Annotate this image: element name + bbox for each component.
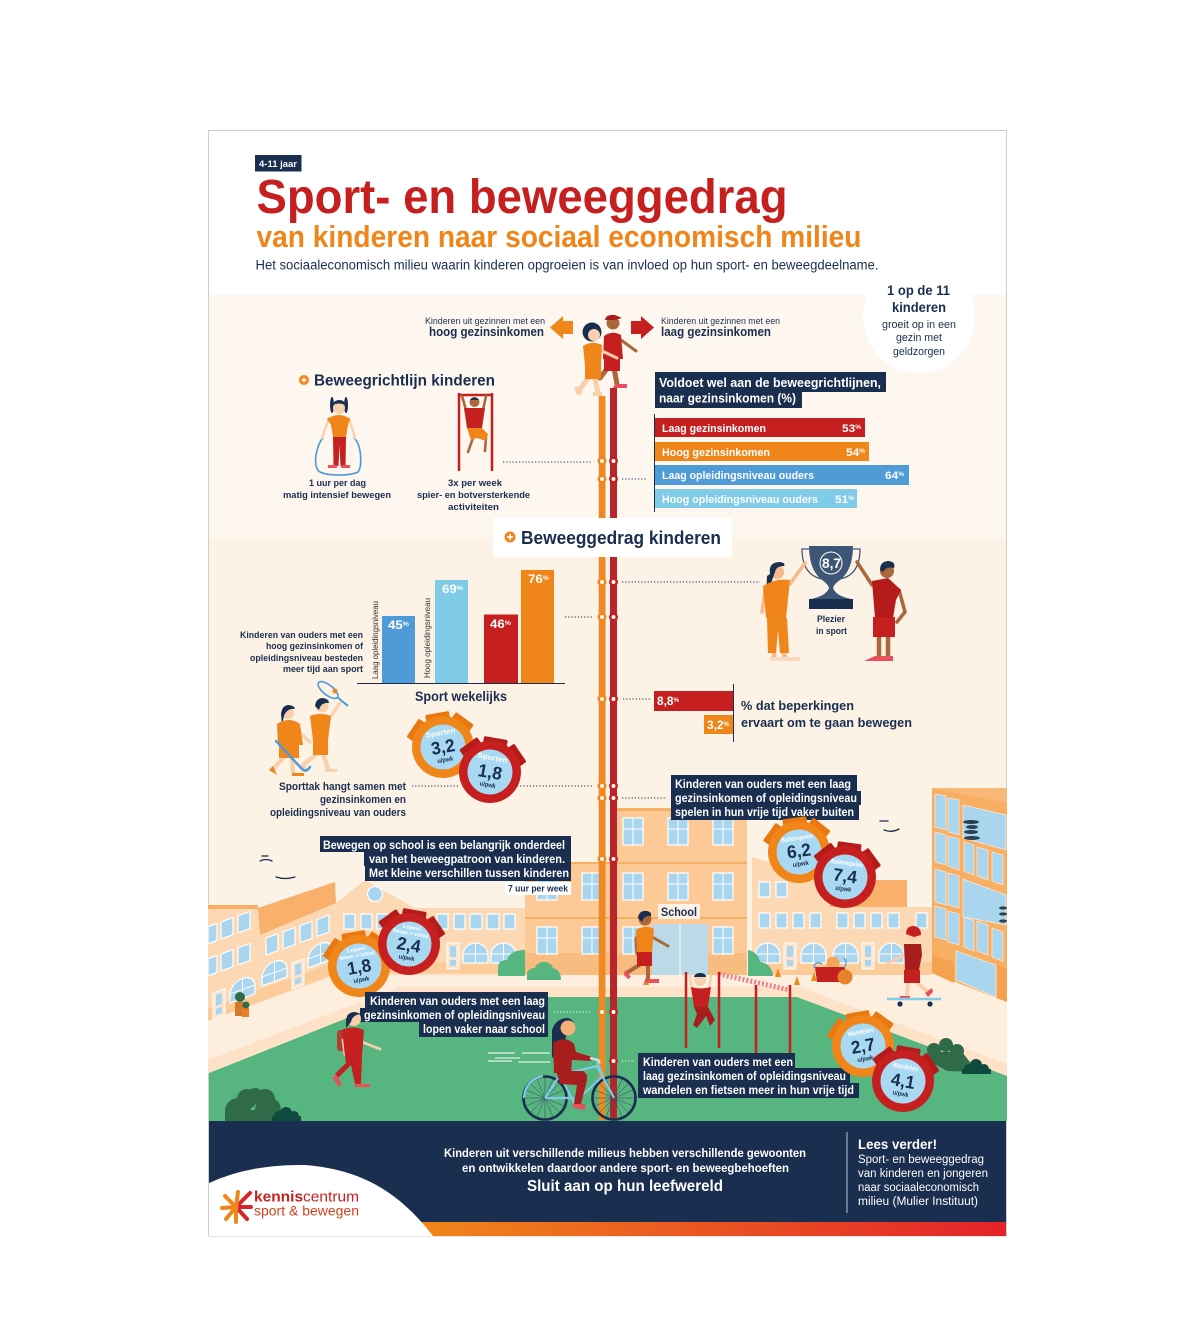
stopwatch: lopen/fietsen 1,8: 1,8 (346, 955, 373, 979)
bar 76%: 76 (528, 574, 541, 586)
stopwatch: buitenspelen 6,2 (760, 813, 837, 887)
footer message: Kinderen uit verschillende milieus hebben verschillende gewoonten (444, 1146, 806, 1160)
arrow right red (631, 316, 654, 339)
text: 3x per week (417, 478, 530, 513)
text: sporttak: opleidingsniveau van ouders (270, 807, 406, 819)
figure: girl on bicycle (524, 1018, 636, 1120)
text: 3x per week: activiteiten (448, 502, 499, 513)
central orange line (599, 396, 606, 1120)
chart: beperkingen: % dat beperkingen (741, 698, 854, 713)
text: sporttak: Sporttak hangt samen met (279, 781, 406, 793)
bar: laag opleidingsniveau 64%: % (898, 472, 905, 478)
bar chart: sport wekelijks: Hoog opleidingsniveau (423, 598, 432, 678)
stopwatch: sporten 1,8: u/pwk (479, 780, 496, 790)
illustration: children with hockey stick and racket (269, 679, 348, 776)
right lower building (752, 857, 932, 976)
callout: wandelen en fietsen: Kinderen van ouders met een (643, 1055, 793, 1069)
footer gradient stripe (420, 1222, 1006, 1236)
bar 45%: 45 (388, 620, 401, 632)
bar 46%: 46 (490, 619, 503, 631)
icon: girl with skipping rope (316, 397, 361, 475)
stopwatch: buitenspelen 7,4 (807, 838, 884, 912)
bar: hoog opleidingsniveau 51%: 51 (835, 494, 847, 506)
text: 3x per week: spier- en botversterkende (417, 490, 530, 501)
stopwatch: sporten 3,2: 3,2 (429, 735, 457, 759)
section heading: Beweeggedrag kinderen (493, 518, 732, 557)
chart: beperkingen: 3,2 (707, 720, 723, 732)
callout: wandelen en fietsen: laag gezinsinkomen of opleidingsniveau (643, 1069, 846, 1083)
callout: lopen naar school: Kinderen van ouders met een laag (370, 994, 545, 1008)
footer message: en ontwikkelen daardoor andere sport- en beweegbehoeften (462, 1161, 789, 1175)
label: hoog gezinsinkomen (425, 316, 545, 339)
bar 76%: % (543, 576, 550, 582)
stopwatch: wandelen 2,7 (823, 1006, 902, 1082)
bar: laag gezinsinkomen 53%: % (855, 425, 862, 431)
bar 45%: % (403, 622, 410, 628)
stopwatch: lopen/fietsen 2,4: fietsen -> school (392, 928, 429, 940)
left building (208, 880, 525, 1021)
callout: buitenspelen: Kinderen van ouders met een laag (675, 777, 851, 791)
callout: bewegen op school: Met kleine verschillen tussen kinderen (369, 866, 569, 880)
callout: buitenspelen: spelen in hun vrije tijd vaker buiten (675, 805, 854, 819)
callout circle: 1 op de 11 kinderen: geldzorgen (893, 346, 945, 358)
figure: kid on skateboard (887, 926, 941, 1007)
bar 69%: 69 (442, 584, 455, 596)
illustration: children with trophy: Plezier (817, 614, 845, 624)
callout circle: 1 op de 11 kinderen: kinderen (892, 300, 946, 315)
title: Sport- en beweeggedrag (256, 171, 788, 224)
bar: laag opleidingsniveau 64% (655, 465, 909, 485)
age tag (255, 155, 302, 172)
bar 76% (521, 570, 554, 683)
bar: hoog gezinsinkomen 54%: 54 (846, 447, 858, 459)
bar: hoog opleidingsniveau 51%: Hoog opleidingsniveau ouders (662, 494, 818, 506)
stopwatch: lopen/fietsen 2,4: 2,4 (395, 933, 422, 957)
callout: bewegen op school: Bewegen op school is een belangrijk onderdeel (323, 838, 565, 852)
logo panel: kenniscentrum (254, 1188, 359, 1206)
stopwatch: sporten 3,2 (403, 707, 482, 783)
read more panel: van kinderen en jongeren (858, 1168, 988, 1180)
bushes near school (498, 950, 773, 980)
footer band (209, 1121, 1006, 1236)
chart heading: Voldoet wel aan de beweegrichtlijnen: Voldoet wel aan de beweegrichtlijnen, (659, 375, 881, 390)
bar: laag gezinsinkomen 53%: Laag gezinsinkomen (662, 423, 766, 435)
stopwatch: buitenspelen 7,4: u/pwk (835, 885, 852, 894)
stopwatch: wandelen 4,1: 4,1 (889, 1069, 917, 1093)
callout circle: 1 op de 11 kinderen: groeit op in een (882, 319, 956, 331)
stopwatch: lopen/fietsen 1,8: Lopen/ (347, 946, 366, 955)
text: kinderen besteden meer tijd aan sport: meer tijd aan sport (283, 664, 364, 675)
stopwatch: wandelen 4,1: u/pwk (892, 1089, 909, 1099)
logo panel (209, 1165, 433, 1236)
callout: bewegen op school (320, 836, 571, 881)
read more panel: Lees verder! (858, 1136, 937, 1152)
chart: beperkingen (654, 684, 912, 742)
footer message (444, 1146, 806, 1195)
text: kinderen besteden meer tijd aan sport: opleidingsniveau besteden (250, 653, 363, 664)
footer message: Sluit aan op hun leefwereld (527, 1178, 723, 1195)
stopwatch: lopen/fietsen 1,8: fietsen -> school (339, 950, 376, 962)
label: 7 uur per week: 7 uur per week (508, 884, 569, 894)
label: hoog gezinsinkomen: hoog gezinsinkomen (429, 324, 544, 339)
lawn (209, 997, 1007, 1121)
bar 69%: % (457, 586, 464, 592)
illustration: children with trophy (762, 546, 905, 661)
text: 3x per week: 3x per week (448, 478, 503, 489)
bar 69% (435, 580, 468, 683)
bar: laag opleidingsniveau 64%: Laag opleidingsniveau ouders (662, 470, 814, 482)
figure: boy walking at school (624, 911, 668, 983)
chart: beperkingen: ervaart om te gaan bewegen (741, 715, 912, 730)
bush right (927, 1038, 991, 1074)
bar: laag gezinsinkomen 53% (655, 418, 865, 437)
logo panel: sport & bewegen (254, 1202, 359, 1218)
stopwatch: sporten 3,2: u/pwk (437, 755, 454, 765)
stopwatch: lopen/fietsen 2,4: u/pwk (398, 953, 415, 963)
callout: buitenspelen (671, 775, 861, 820)
read more panel: naar sociaaleconomisch (858, 1182, 979, 1194)
callout: wandelen en fietsen: wandelen en fietsen meer in hun vrije tijd (642, 1083, 854, 1097)
text: kinderen besteden meer tijd aan sport: Kinderen van ouders met een (240, 630, 363, 641)
stopwatch: wandelen 2,7: 2,7 (849, 1034, 877, 1058)
bar 46%: % (505, 621, 512, 627)
callout: bewegen op school: van het beweegpatroon van kinderen. (369, 852, 565, 866)
illustration: children with trophy: in sport (816, 626, 847, 636)
stopwatch: buitenspelen 6,2: 6,2 (786, 839, 812, 863)
speed lines (488, 1053, 550, 1062)
chart: beperkingen: % (723, 722, 730, 728)
walking pair of children (574, 315, 636, 396)
age tag: 4-11 jaar (259, 159, 298, 169)
stopwatch: wandelen 4,1: Wandelen (892, 1062, 919, 1073)
stopwatch: sporten 1,8 (451, 732, 530, 808)
intro text: Het sociaaleconomisch milieu waarin kinderen opgroeien is van invloed op hun sport- en beweegdeelname. (256, 258, 878, 272)
stopwatch: sporten 1,8: Sporten (477, 751, 508, 765)
read more panel: milieu (Mulier Instituut) (858, 1196, 978, 1208)
text: 1 uur per dag: 1 uur per dag (309, 478, 366, 489)
chart heading: Voldoet wel aan de beweegrichtlijnen: naar gezinsinkomen (%) (659, 390, 796, 406)
central red line (610, 388, 617, 1120)
trophy (802, 546, 860, 609)
birds (260, 821, 899, 878)
plant pots (235, 992, 250, 1017)
cones (643, 968, 817, 985)
bar: hoog opleidingsniveau 51%: % (848, 496, 855, 502)
callout circle: 1 op de 11 kinderen: 1 op de 11 (887, 283, 950, 298)
text: 1 uur per dag (283, 478, 391, 501)
label: laag gezinsinkomen: Kinderen uit gezinnen met een (661, 316, 780, 327)
bar: laag opleidingsniveau 64%: 64 (885, 470, 897, 482)
subtitle: van kinderen naar sociaal economisch milieu (256, 219, 862, 254)
stopwatch: lopen/fietsen 1,8: u/pwk (353, 975, 370, 985)
stopwatch: buitenspelen 6,2: Buitenspelen (781, 833, 813, 844)
label: hoog gezinsinkomen: Kinderen uit gezinnen met een (425, 316, 545, 327)
school building (525, 808, 747, 975)
text: sporttak: gezinsinkomen en (320, 794, 406, 806)
arrow left orange (550, 316, 573, 339)
stopwatch: wandelen 4,1 (864, 1041, 943, 1117)
bar: laag gezinsinkomen 53%: 53 (842, 423, 854, 435)
stopwatch: wandelen 2,7: Wandelen (847, 1027, 874, 1038)
bar chart: sport wekelijks: Laag opleidingsniveau (371, 601, 380, 679)
bar: hoog gezinsinkomen 54% (655, 442, 869, 461)
icon: logo star (222, 1192, 251, 1222)
bush bottom-left (225, 1088, 301, 1124)
stopwatch: lopen/fietsen 1,8 (319, 926, 398, 1002)
cream band: guideline section (209, 295, 1006, 538)
central scene: school yard (208, 788, 1007, 1124)
label: laag gezinsinkomen (661, 316, 780, 339)
stopwatch: wandelen 2,7: u/pwk (857, 1054, 874, 1064)
right apartment tower (932, 788, 1007, 1002)
bar: hoog gezinsinkomen 54%: % (859, 449, 866, 455)
bar chart: sport wekelijks: Sport wekelijks (415, 689, 507, 704)
read more panel: Sport- en beweeggedrag (858, 1154, 984, 1166)
timeline nodes (599, 458, 617, 1064)
stopwatch: buitenspelen 7,4: Buitenspelen (831, 858, 863, 869)
text: kinderen besteden meer tijd aan sport (240, 630, 364, 675)
text: kinderen besteden meer tijd aan sport: hoog gezinsinkomen of (266, 641, 364, 652)
terrace and ground (208, 975, 1007, 1085)
callout: lopen naar school: lopen vaker naar school (423, 1022, 545, 1036)
text: 1 uur per dag: matig intensief bewegen (283, 490, 391, 501)
stopwatch: buitenspelen 7,4: 7,4 (832, 864, 858, 888)
callout circle: 1 op de 11 kinderen (863, 261, 975, 373)
bar: hoog gezinsinkomen 54%: Hoog gezinsinkomen (662, 447, 770, 459)
read more panel (847, 1132, 988, 1213)
bar: hoog opleidingsniveau 51% (655, 489, 857, 508)
chart heading: Voldoet wel aan de beweegrichtlijnen (655, 372, 886, 408)
stopwatch: lopen/fietsen 2,4: Lopen/ (402, 924, 422, 933)
chart: beperkingen: % (673, 698, 680, 704)
bar chart: sport wekelijks (357, 570, 565, 704)
bar 45% (382, 616, 415, 683)
climbing frame with hanging girl (686, 972, 790, 1060)
stopwatch: lopen/fietsen 2,4 (370, 904, 449, 980)
figure: girl walking to school (332, 1012, 380, 1087)
callout: wandelen en fietsen (638, 1053, 859, 1098)
label: school: School (661, 907, 697, 919)
label: laag gezinsinkomen: laag gezinsinkomen (661, 324, 771, 339)
callout: lopen naar school (360, 992, 548, 1037)
poster sheet (208, 130, 1006, 1236)
section heading: Beweeggedrag kinderen: Beweeggedrag kinderen (521, 527, 721, 548)
callout: lopen naar school: gezinsinkomen of opleidingsniveau (364, 1008, 545, 1022)
stopwatch: buitenspelen 6,2: u/pwk (792, 860, 809, 869)
horizontal bar chart: guidelines (654, 414, 909, 512)
peach background: behaviour section (209, 538, 1006, 1121)
trophy: 8,7 (822, 555, 841, 571)
bar 46% (484, 614, 518, 683)
callout circle: 1 op de 11 kinderen: gezin met (896, 332, 942, 344)
icon: boy on pull-up bar (458, 393, 493, 471)
dotted connectors (412, 462, 760, 1061)
stopwatch: sporten 1,8: 1,8 (476, 760, 504, 784)
heading: Beweegrichtlijn kinderen: Beweegrichtlijn kinderen (314, 372, 495, 390)
stopwatch: sporten 3,2: Sporten (425, 726, 456, 740)
callout: buitenspelen: gezinsinkomen of opleidingsniveau (675, 791, 857, 805)
text: sporttak (270, 781, 406, 819)
basket with balls (814, 956, 852, 984)
chart: beperkingen: 8,8 (657, 696, 673, 708)
